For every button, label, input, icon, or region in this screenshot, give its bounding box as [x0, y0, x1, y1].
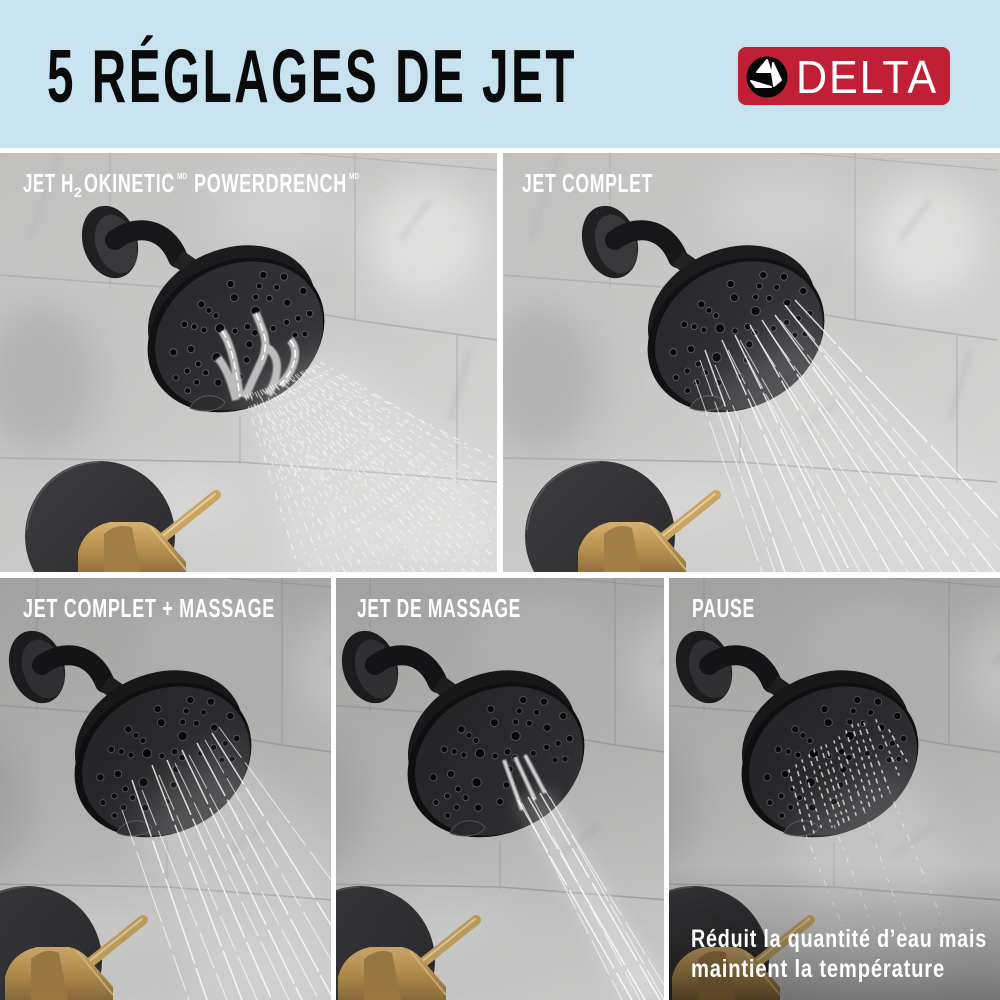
panel: Jet de massage	[240, 565, 780, 1000]
label: Jet H2Okinetic PowerDrench	[23, 168, 359, 200]
panel: Jet H2Okinetic PowerDrench	[0, 140, 520, 611]
logo: Delta: DELTA	[796, 51, 938, 103]
label: Jet H2Okinetic PowerDrench: OKINETIC	[84, 168, 175, 198]
panel: Jet complet + massage	[0, 565, 447, 1000]
panel: Jet complet	[480, 140, 1000, 611]
label: Jet de massage: JET DE MASSAGE	[357, 593, 521, 623]
label: Jet H2Okinetic PowerDrench: JET H	[23, 168, 74, 198]
caption: pause description: maintient la température	[691, 955, 945, 983]
label: Jet H2Okinetic PowerDrench: POWERDRENCH	[194, 168, 347, 198]
water droplets	[789, 720, 954, 1000]
spray cone	[218, 313, 497, 572]
logo: Delta	[738, 47, 950, 105]
panel: Pause	[574, 565, 1000, 1000]
water stream	[504, 755, 664, 1000]
label: Jet H2Okinetic PowerDrench: 2	[74, 184, 82, 200]
label: Jet H2Okinetic PowerDrench: MD	[349, 172, 359, 181]
water streams	[695, 300, 1000, 572]
label: Jet complet: JET COMPLET	[522, 168, 653, 198]
caption: pause description	[691, 925, 987, 983]
water streams	[122, 727, 331, 1000]
header banner	[0, 0, 1000, 148]
label: Jet complet + massage: JET COMPLET + MASSAGE	[23, 593, 275, 623]
title: 5 RÉGLAGES DE JET	[47, 34, 577, 118]
label: Pause: PAUSE	[692, 593, 755, 623]
label: Jet H2Okinetic PowerDrench: MD	[177, 172, 187, 181]
